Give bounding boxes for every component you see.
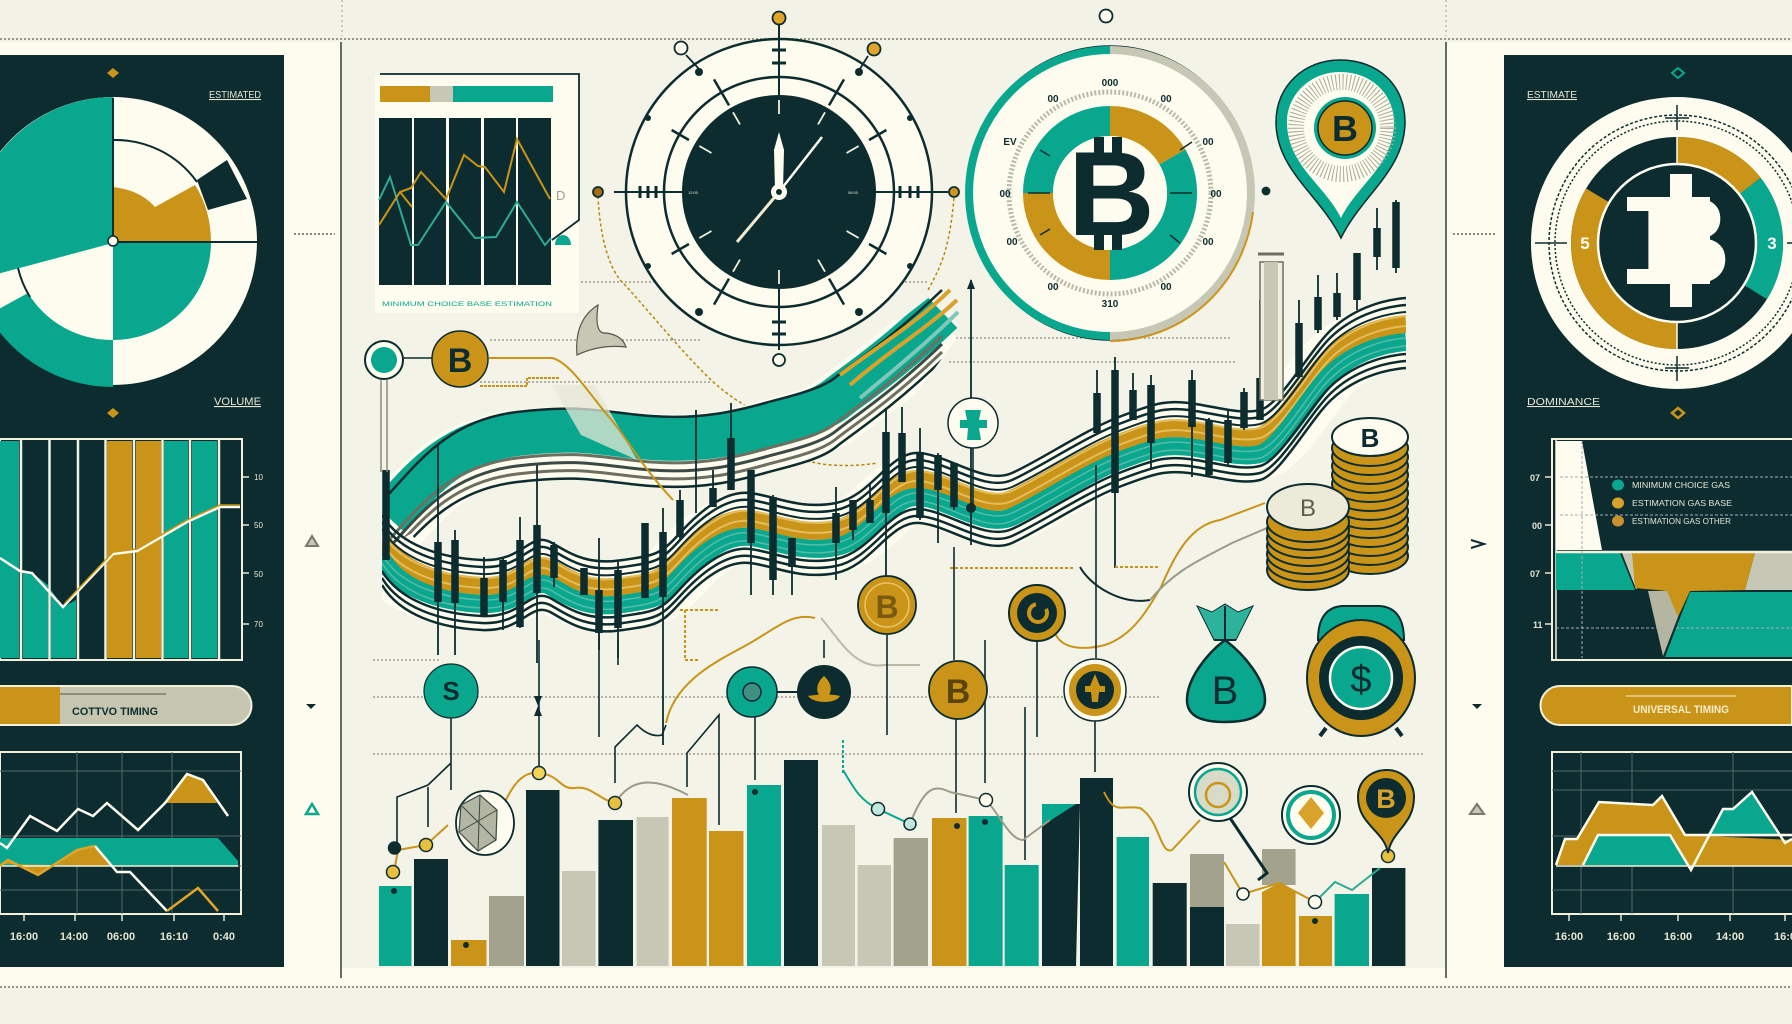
gold coin centre bbox=[858, 576, 916, 634]
magnifier icon bbox=[1189, 763, 1267, 880]
area chart lower right: 16:00 bbox=[1555, 931, 1583, 943]
location pin with coin bbox=[1276, 60, 1405, 238]
alarm clock: $ bbox=[1350, 659, 1372, 701]
panel: left dashboard bbox=[0, 55, 284, 967]
compass labels: 00 bbox=[1202, 237, 1214, 248]
compass ring segments bbox=[1038, 121, 1182, 265]
icon: teal diamond bbox=[1672, 68, 1684, 78]
bitcoin coin top left: B bbox=[448, 342, 472, 380]
label: dominance: DOMINANCE bbox=[1527, 396, 1600, 408]
coin stack right bbox=[1332, 418, 1408, 574]
area chart lower right: 16:00 bbox=[1607, 931, 1635, 943]
bar chart with trend line bbox=[0, 439, 263, 660]
compass labels: 00 bbox=[999, 189, 1011, 200]
marker arrow bbox=[534, 696, 542, 716]
bar chart with trend line: 70 bbox=[254, 620, 263, 629]
lower ribbon bbox=[382, 298, 1406, 631]
bottom bar chart bbox=[379, 760, 1405, 966]
clock hands bbox=[737, 132, 822, 242]
bitcoin compass bbox=[967, 46, 1253, 341]
area chart with legend bbox=[1530, 439, 1792, 660]
compass labels bbox=[999, 78, 1222, 310]
gold pin icon: B bbox=[1376, 784, 1396, 814]
location pin with coin: B bbox=[1332, 108, 1358, 149]
area chart lower right: 16:00 bbox=[1664, 931, 1692, 943]
area chart with legend: 07 bbox=[1530, 473, 1540, 483]
polyline over bars bbox=[394, 740, 1380, 902]
progress pill: universal timing bbox=[1540, 686, 1792, 725]
teal coin bbox=[424, 664, 478, 718]
line and area chart: 16:00 bbox=[10, 931, 38, 943]
icon: gold diamond right bbox=[1672, 408, 1684, 418]
clock dial: 06:00 bbox=[848, 190, 859, 195]
bitcoin gauge: 3 bbox=[1767, 234, 1777, 253]
progress pill: costing timing: COTTVO TIMING bbox=[72, 706, 158, 718]
legend: ESTIMATION GAS BASE bbox=[1632, 498, 1732, 508]
coin stack right: B bbox=[1361, 423, 1379, 453]
compass labels: 00 bbox=[1047, 282, 1059, 293]
icon: gem bbox=[456, 791, 514, 855]
progress pill: costing timing bbox=[0, 686, 252, 725]
money bag bbox=[1187, 604, 1265, 722]
area chart lower right bbox=[1552, 752, 1792, 943]
line and area chart bbox=[0, 752, 241, 943]
line and area chart: 14:00 bbox=[60, 931, 88, 943]
gold coin lower: B bbox=[946, 673, 970, 711]
left gutter markers bbox=[306, 536, 318, 814]
cream column marker bbox=[1258, 254, 1284, 400]
compass labels: 00 bbox=[1202, 137, 1214, 148]
money bag: B bbox=[1212, 669, 1238, 713]
diamond coin icon bbox=[1282, 786, 1340, 844]
teal leaf coin bbox=[948, 398, 998, 448]
alarm clock bbox=[1307, 606, 1415, 736]
area chart with legend: 07 bbox=[1530, 569, 1540, 579]
guide lines bbox=[373, 282, 1425, 754]
panel: right dashboard bbox=[1504, 55, 1792, 967]
clock knobs bbox=[593, 10, 1270, 366]
compass labels: 00 bbox=[1160, 94, 1172, 105]
compass labels: 000 bbox=[1102, 78, 1119, 89]
gold pin icon bbox=[1358, 770, 1414, 853]
mini line chart card bbox=[375, 74, 579, 313]
pie chart bbox=[0, 97, 257, 387]
line and area chart: 0:40 bbox=[213, 931, 235, 943]
area chart lower right: 14:00 bbox=[1716, 931, 1744, 943]
gold flow curves bbox=[480, 358, 1267, 723]
dark arrow coin bbox=[1064, 659, 1126, 721]
dark swirl coin bbox=[1009, 585, 1065, 641]
candlesticks bbox=[386, 200, 1396, 745]
icon: grey leaf marker bbox=[577, 305, 626, 355]
bitcoin gauge bbox=[1531, 97, 1792, 389]
face ticks bbox=[699, 100, 859, 284]
line and area chart: 16:10 bbox=[160, 931, 188, 943]
progress pill: universal timing: UNIVERSAL TIMING bbox=[1633, 704, 1729, 716]
legend: ESTIMATION GAS OTHER bbox=[1632, 516, 1731, 526]
label: estimated: ESTIMATED bbox=[209, 89, 261, 101]
compass labels: 310 bbox=[1102, 299, 1119, 310]
area chart with legend: 00 bbox=[1532, 521, 1542, 531]
clock dial bbox=[614, 23, 948, 350]
gold coin centre: B bbox=[875, 589, 899, 625]
dotted gold connectors bbox=[598, 196, 954, 466]
panel: central chart area bbox=[365, 10, 1425, 966]
upper ribbon bbox=[388, 290, 958, 565]
line and area chart: 06:00 bbox=[107, 931, 135, 943]
compass labels: 00 bbox=[1210, 189, 1222, 200]
label: volume: VOLUME bbox=[214, 396, 261, 408]
bitcoin symbol: B bbox=[1640, 170, 1731, 311]
compass labels: 00 bbox=[1160, 282, 1172, 293]
label: estimate: ESTIMATE bbox=[1527, 89, 1577, 101]
dial ticks bbox=[672, 79, 886, 305]
right gutter markers bbox=[1470, 540, 1484, 814]
teal coin: S bbox=[442, 676, 460, 706]
compass labels: 00 bbox=[1006, 237, 1018, 248]
bitcoin gauge: 5 bbox=[1580, 234, 1590, 253]
bar chart with trend line: 50 bbox=[254, 570, 263, 579]
legend: MINIMUM CHOICE GAS bbox=[1632, 480, 1730, 490]
bitcoin symbol: B bbox=[1068, 127, 1155, 261]
bitcoin coin top left bbox=[432, 331, 488, 387]
teal node with stem bbox=[365, 341, 434, 472]
icon: gold diamond top bbox=[107, 68, 119, 78]
teal coin pair bbox=[727, 665, 851, 719]
bar chart with trend line: 50 bbox=[254, 521, 263, 530]
bar chart with trend line: 10 bbox=[254, 473, 263, 482]
coin stack left: B bbox=[1300, 495, 1316, 522]
mini line chart card: D bbox=[556, 188, 565, 203]
gold coin lower bbox=[929, 661, 987, 719]
icon: gold diamond mid bbox=[107, 408, 119, 418]
area chart with legend: 11 bbox=[1533, 620, 1543, 630]
clock dial: 12:00 bbox=[688, 190, 699, 195]
coin stack left bbox=[1267, 484, 1349, 590]
compass labels: 00 bbox=[1047, 94, 1059, 105]
connector stems bbox=[397, 448, 1096, 860]
line nodes bbox=[386, 766, 1394, 908]
mini line chart card: MINIMUM CHOICE BASE ESTIMATION bbox=[382, 302, 552, 308]
legend bbox=[1612, 480, 1732, 526]
compass labels: EV bbox=[1003, 137, 1017, 148]
